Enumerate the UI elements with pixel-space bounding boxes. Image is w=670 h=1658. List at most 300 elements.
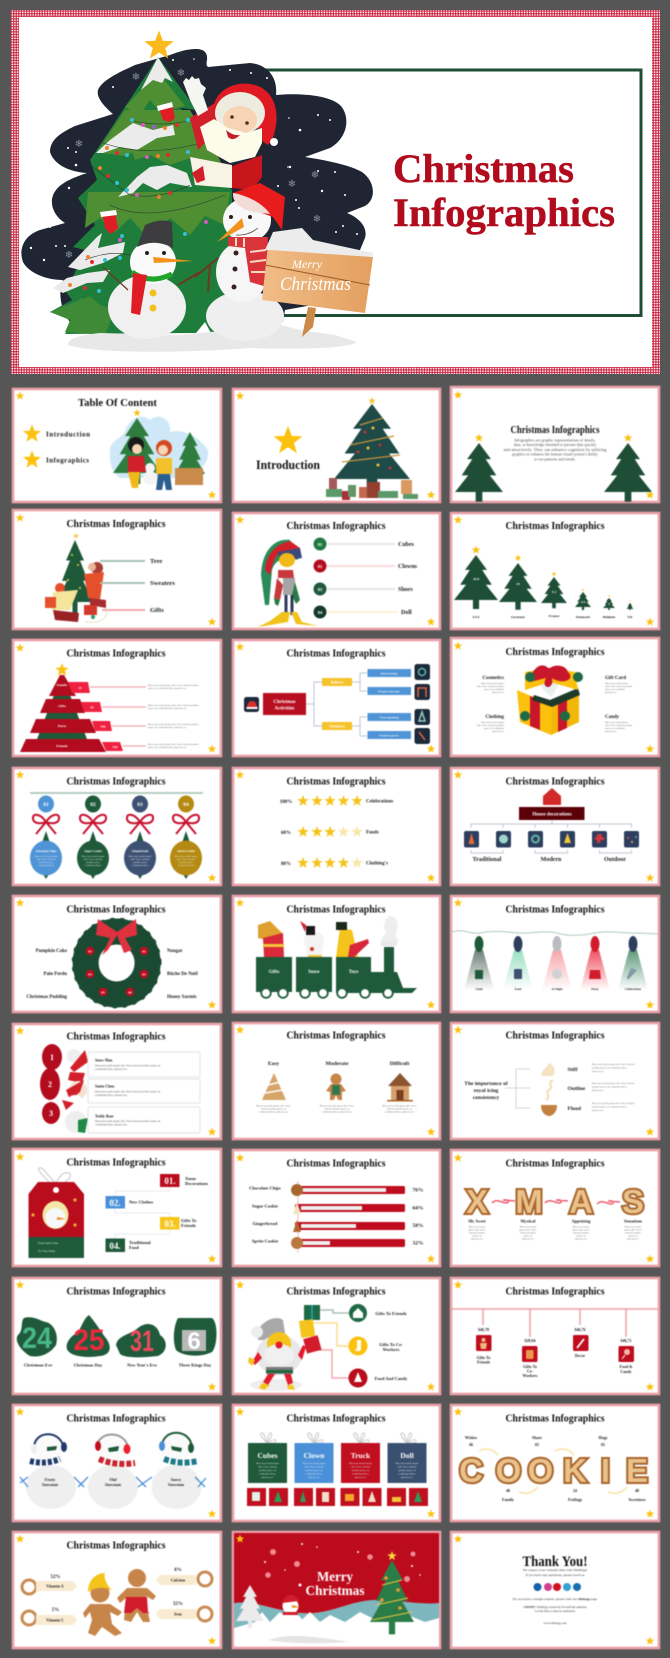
heading: Christmas Infographics — [286, 1030, 386, 1042]
right labels — [167, 949, 198, 1000]
cookie icons — [262, 1073, 413, 1102]
panel: santa gifts — [233, 1278, 440, 1394]
number blobs — [40, 1044, 62, 1124]
bottom labels: 24 — [573, 1488, 577, 1493]
tag hole — [53, 1187, 59, 1193]
budget labels — [477, 1353, 633, 1378]
values: 19 — [516, 582, 520, 586]
date numbers: 25 — [74, 1324, 104, 1357]
descriptions — [148, 684, 199, 749]
corner stars — [236, 1026, 435, 1136]
group labels — [473, 857, 626, 863]
country labels: France — [549, 614, 560, 618]
level labels: Moderate — [326, 1061, 349, 1067]
falling snow — [265, 1549, 416, 1582]
panel: pyramid tree — [13, 640, 221, 756]
panel: COOKIE — [451, 1405, 659, 1521]
beam labels: At Night — [551, 987, 563, 991]
hero Christmas tree — [50, 57, 232, 335]
corner stars — [236, 1408, 435, 1518]
small snow dots — [264, 1543, 421, 1586]
node circles — [348, 1304, 368, 1388]
card text: odio. Fusce lobortis — [351, 1466, 370, 1468]
cookies — [291, 1184, 303, 1249]
country labels: USA — [472, 615, 480, 619]
corner stars — [236, 770, 435, 882]
slide frame — [233, 1150, 440, 1266]
descriptions: vestibulum libero, pharetra nec — [259, 1110, 288, 1114]
card text: pharetra nec — [401, 1476, 413, 1479]
labels: Doll — [401, 610, 412, 616]
budget labels: Workers — [523, 1373, 538, 1378]
numbered circles — [314, 538, 326, 618]
letter descriptions: lobortis porttitor — [625, 1232, 641, 1234]
top labels: Hugs — [599, 1435, 608, 1440]
letter descriptions: Maecenas iaculis — [469, 1226, 485, 1228]
values: 32% — [412, 1240, 424, 1246]
gingerbread couple — [83, 1569, 156, 1636]
icon: house — [543, 788, 561, 805]
connectors — [471, 820, 632, 853]
corner stars — [16, 1152, 216, 1263]
card text: porttitor purus, sit — [398, 1469, 416, 1472]
snowman labels: Olaf — [109, 1478, 117, 1482]
panel: characters list — [13, 1024, 221, 1139]
card text: porttitor purus, sit — [259, 1469, 276, 1472]
panel: tree sweaters gifts — [13, 510, 221, 629]
ball numbers: 04 — [183, 802, 189, 808]
step numbers: 03. — [164, 1219, 176, 1229]
descriptions: purus, sit vestibulum libero pharetra nec — [148, 707, 187, 710]
ball numbers: 02 — [90, 802, 96, 808]
ornament text: Chocolate Chips — [35, 849, 57, 853]
date labels: Three Kings Day — [179, 1362, 212, 1368]
descriptions: purus, sit vestibulum — [605, 727, 625, 730]
node labels: Workers — [383, 1347, 400, 1352]
cookie letters — [466, 1183, 644, 1220]
corner stars — [236, 392, 435, 499]
header label: House decorations — [532, 812, 572, 818]
values: $28,04 — [524, 1338, 536, 1343]
descriptions: Maecenas iaculis ipsum — [481, 682, 504, 685]
descriptions: purus, sit vestibulum libero pharetra nec — [148, 726, 187, 729]
top labels: 65 — [601, 1442, 605, 1447]
tier labels: Party — [58, 724, 66, 728]
beam labels: Party — [591, 987, 599, 991]
step labels: New Clothes — [129, 1200, 153, 1204]
corner stars — [16, 1408, 216, 1518]
leaf labels: Festive party — [379, 733, 399, 737]
root box — [263, 693, 306, 715]
date labels — [24, 1362, 212, 1368]
icing labels — [568, 1067, 586, 1112]
leaf labels: Tree hunting — [379, 715, 399, 719]
values: 9.2 — [552, 590, 556, 594]
group labels: Outdoor — [604, 857, 626, 863]
descriptions: Maecenas iaculis ipsum — [605, 682, 628, 685]
budget labels: Food & — [620, 1364, 633, 1369]
descriptions — [477, 682, 633, 733]
bows — [33, 815, 199, 834]
labels: Gift Card — [605, 676, 626, 681]
ornament descriptions: Maecenas iaculis ipsum — [35, 855, 58, 858]
letter descriptions: Maecenas iaculis — [520, 1226, 536, 1228]
top labels: Wishes — [465, 1435, 478, 1440]
slide frame — [451, 1532, 659, 1648]
node labels — [375, 1311, 408, 1381]
thank you heading: Thank You! — [522, 1554, 588, 1570]
heading: Christmas Infographics — [506, 1286, 605, 1298]
connectors — [314, 1310, 350, 1378]
slide frame — [233, 640, 440, 756]
cookie letters — [459, 1452, 648, 1489]
corner stars — [16, 392, 216, 499]
ornament descriptions: odio. Fusce lobortis — [84, 858, 103, 861]
category labels — [366, 800, 393, 866]
row labels: Sprite Cookie — [252, 1238, 278, 1244]
leaf labels: Festive movies — [378, 689, 400, 693]
branch labels: Outdoors — [329, 724, 345, 728]
group labels: Traditional — [473, 857, 502, 863]
descriptions: vestibulum libero, pharetra nec — [385, 1110, 414, 1114]
ornament descriptions: porttitor purus — [179, 861, 193, 864]
values: 4.5 — [581, 600, 585, 604]
bottom labels: 48 — [635, 1488, 639, 1493]
descriptions: odio. Fusce lobortis porttitor — [477, 685, 504, 688]
letter descriptions: lobortis porttitor — [573, 1232, 589, 1234]
corner stars — [16, 898, 216, 1009]
white pine — [236, 1585, 264, 1628]
headphones — [34, 1433, 192, 1448]
hero white panel — [19, 17, 652, 367]
snowflakes: ❄ — [311, 170, 319, 181]
descriptions: porttitor purus, sit vestibulum libero, — [592, 1086, 628, 1088]
card text: Maecenas iaculis ipsum — [303, 1462, 326, 1465]
left labels: Pain Perdu — [43, 972, 67, 977]
numbers: 04 — [318, 610, 323, 615]
snowman labels — [42, 1478, 185, 1487]
descriptions: odio. Fusce lobortis porttitor — [605, 724, 633, 727]
ornament descriptions: vestibulum libero — [132, 864, 149, 867]
step labels: Friends — [181, 1223, 196, 1228]
corner stars — [236, 516, 435, 626]
corner stars — [454, 770, 654, 882]
letter descriptions: purus, sit — [577, 1234, 586, 1238]
budget labels: Gifts To — [523, 1364, 537, 1369]
root label: Activities — [274, 706, 295, 712]
statement: consistency — [473, 1095, 500, 1101]
budget labels: Candy — [620, 1369, 632, 1374]
branch boxes — [322, 678, 352, 730]
descriptions: odio. Fusce lobortis porttitor — [477, 724, 504, 727]
country labels: UK — [627, 615, 633, 619]
cookie letters: A — [569, 1183, 593, 1220]
ear cups — [31, 1441, 194, 1454]
slide frame — [451, 638, 659, 756]
level labels: Easy — [268, 1061, 279, 1067]
tag footer text: To: Your Name — [38, 1250, 56, 1253]
paragraph: to see patterns and trends. — [534, 456, 576, 461]
tag body — [28, 1182, 84, 1237]
date numbers — [22, 1322, 201, 1358]
tree star — [55, 663, 69, 676]
illustration: elf — [258, 540, 318, 627]
row labels: Chocolate Chips — [249, 1186, 281, 1190]
numbered dots — [86, 947, 148, 996]
labels: Cosmetics — [482, 676, 504, 681]
slide frame — [451, 387, 659, 502]
leaf boxes — [368, 669, 411, 739]
cookie letters: S — [622, 1183, 644, 1220]
tag string — [39, 1168, 70, 1190]
panel: hero cover — [11, 10, 660, 374]
branch labels — [329, 680, 345, 728]
tier labels: Gifts — [58, 704, 66, 708]
ornament text: Gingerbread — [132, 849, 149, 853]
letter descriptions: pharetra nec — [522, 1238, 534, 1240]
panel: table of content — [13, 389, 221, 502]
tier labels — [56, 683, 118, 749]
snowman labels: Snowman — [42, 1483, 59, 1487]
panel: budget — [451, 1278, 659, 1394]
slide frame — [451, 896, 659, 1012]
root label — [273, 700, 296, 712]
top labels: Share — [532, 1435, 542, 1440]
green title frame — [240, 70, 641, 316]
card text: porttitor purus, sit — [305, 1469, 323, 1472]
snow ground — [234, 1612, 439, 1646]
descriptions: Maecenas iaculis ipsum odio. Fusce lobortis porttitor — [148, 743, 199, 746]
leaf icon glyphs — [418, 668, 426, 740]
bulbs — [474, 936, 638, 952]
red icon tiles — [476, 1335, 634, 1362]
card titles — [257, 1451, 414, 1460]
list labels — [46, 430, 90, 464]
dot numbers: 02 — [142, 950, 146, 954]
card text: pharetra nec — [308, 1476, 320, 1479]
letter descriptions: ipsum odio. Fusce — [624, 1228, 642, 1232]
letter descriptions: lobortis porttitor — [469, 1232, 485, 1234]
heading: Christmas Infographics — [286, 904, 386, 916]
card headings: Snow Man — [95, 1058, 113, 1062]
right tree — [604, 434, 652, 502]
descriptions: pharetra nec — [592, 1089, 604, 1092]
labels: Sweaters — [150, 580, 175, 587]
card text: porttitor purus, sit — [352, 1469, 369, 1472]
descriptions: Maecenas iaculis ipsum odio. Fusce — [382, 1104, 417, 1108]
letter descriptions: purus, sit — [524, 1234, 533, 1238]
snowman heads — [34, 1435, 189, 1463]
decorated tree — [370, 1551, 414, 1634]
descriptions — [256, 1104, 417, 1114]
greeting: Merry — [317, 1570, 353, 1585]
scarves — [30, 1459, 198, 1464]
card titles: Truck — [351, 1451, 371, 1460]
labels: Gifts — [150, 607, 164, 614]
step numbers — [109, 1176, 176, 1251]
light beams — [464, 950, 648, 990]
corner stars — [454, 642, 654, 753]
cookie letters: K — [563, 1452, 587, 1489]
paragraph: and attractively. They can enhance cognition by utilizing — [504, 447, 606, 452]
cookie letters: M — [515, 1183, 543, 1220]
card text: odio. Fusce lobortis — [305, 1466, 324, 1468]
heading: Christmas Infographics — [506, 521, 605, 532]
letter descriptions: pharetra nec — [627, 1238, 639, 1240]
top labels: 46 — [469, 1442, 473, 1447]
corner stars — [16, 1026, 216, 1136]
slide frame — [13, 1278, 221, 1394]
card text: vestibulum libero, — [398, 1472, 416, 1476]
ball numbers: 01 — [43, 802, 49, 808]
dot numbers — [88, 950, 146, 994]
panel: train — [233, 896, 440, 1012]
panel: elf list — [233, 513, 440, 629]
nutrient labels — [46, 1578, 186, 1622]
card text: vestibulum libero, — [305, 1472, 323, 1476]
left labels — [26, 949, 68, 1000]
star on tree — [144, 30, 174, 59]
wheels — [261, 988, 393, 998]
statement — [464, 1081, 508, 1101]
numbers: 03 — [318, 587, 323, 592]
corner stars — [16, 770, 216, 882]
corner stars — [236, 898, 435, 1009]
descriptions: lobortis porttitor purus, sit — [261, 1108, 286, 1110]
dot numbers: 04 — [142, 972, 146, 976]
ornament caps — [42, 831, 190, 879]
nutrient labels: Vitamin A — [46, 1584, 64, 1588]
panel: gift box — [451, 638, 659, 756]
ornament descriptions — [35, 855, 198, 867]
card text: vestibulum libero, pharetra nec — [95, 1124, 128, 1126]
panel: introduction — [233, 389, 440, 502]
pink arrows — [492, 1200, 620, 1204]
heading: Introduction — [256, 457, 321, 472]
descriptions: purus, sit vestibulum — [605, 688, 625, 691]
wooden sign: Christmas — [280, 274, 351, 295]
slide frame — [233, 1278, 440, 1394]
corner stars — [454, 1280, 654, 1391]
red tiles — [247, 1488, 428, 1506]
rating stars — [297, 795, 363, 868]
node labels: Gifts To Friends — [375, 1311, 407, 1316]
heading: Christmas Infographics — [510, 425, 600, 436]
wire — [452, 931, 658, 935]
slide frame — [13, 768, 221, 885]
card text: vestibulum libero, pharetra nec — [95, 1094, 128, 1097]
descriptions: Maecenas iaculis ipsum odio. Fusce — [256, 1104, 291, 1108]
ornament descriptions: vestibulum libero — [85, 864, 102, 867]
illustration: children with snowman — [110, 409, 208, 490]
values: 64% — [412, 1206, 424, 1212]
dot numbers: 01 — [88, 950, 92, 954]
cookie letters: E — [626, 1452, 648, 1489]
heading: Christmas Infographics — [66, 1414, 166, 1424]
card titles: Doll — [400, 1451, 414, 1460]
large ornaments — [30, 840, 202, 876]
train labels — [269, 970, 358, 975]
card text: odio. Fusce lobortis — [258, 1466, 277, 1468]
country labels — [472, 614, 633, 619]
date numbers: 31 — [130, 1325, 154, 1358]
tier labels: 45 — [90, 706, 94, 710]
heading: Table Of Content — [78, 398, 158, 409]
panel: gift cards — [233, 1405, 440, 1521]
letter descriptions — [468, 1226, 642, 1240]
card titles: Clown — [304, 1451, 325, 1460]
corner star — [236, 1534, 244, 1543]
country labels: Denmark — [576, 615, 590, 619]
snowflakes: ❄ — [177, 68, 185, 79]
category labels: Foods — [366, 830, 379, 836]
numbers: 3 — [49, 1109, 53, 1118]
card headings — [95, 1058, 115, 1118]
heading: Christmas Infographics — [66, 776, 166, 788]
heading: Christmas Infographics — [286, 521, 386, 532]
bracket — [505, 1069, 530, 1108]
tier labels: Friends — [56, 744, 68, 748]
left labels: Christmas Pudding — [26, 995, 68, 1000]
snowman right — [178, 183, 285, 341]
group labels: Modern — [541, 857, 562, 863]
card text: Maecenas iaculis ipsum — [349, 1462, 372, 1465]
leaf labels: Decorating — [381, 671, 398, 675]
corner stars — [16, 514, 216, 626]
heading: Christmas Infographics — [286, 1158, 386, 1170]
corner stars — [454, 390, 654, 499]
values: $46,78 — [478, 1327, 489, 1332]
card text: Maecenas iaculis ipsum odio. Fusce lobortis porttitor purus, sit — [95, 1090, 161, 1094]
leader lines — [90, 687, 146, 746]
labels: Candy — [605, 715, 620, 720]
nutrient labels: Vitamin C — [46, 1618, 64, 1622]
category labels: Celebrations — [366, 800, 393, 804]
icing icons — [541, 1063, 557, 1116]
panel: star ratings — [233, 768, 440, 885]
train labels: Snow — [308, 970, 320, 975]
stockings — [102, 104, 175, 234]
train labels: Toys — [349, 970, 358, 975]
leaf labels — [378, 671, 400, 737]
nutrient labels: Iron — [174, 1612, 183, 1616]
smoke — [380, 916, 399, 942]
slide frame — [233, 1405, 440, 1521]
step labels — [129, 1176, 208, 1250]
gifts — [326, 478, 418, 500]
letter descriptions: purus, sit — [473, 1234, 482, 1238]
statement: royal icing — [474, 1088, 499, 1094]
tier labels: Family — [57, 683, 67, 687]
snowflakes: ❄ — [65, 250, 73, 261]
beam labels: Cloth — [475, 987, 483, 991]
red outfit — [124, 1597, 150, 1613]
slide frame — [13, 1149, 221, 1266]
step boxes — [106, 1174, 180, 1252]
panel: string lights — [451, 896, 659, 1012]
slide frame — [233, 1532, 440, 1648]
top labels — [465, 1435, 608, 1447]
percent labels — [280, 800, 292, 867]
heading: Christmas Infographics — [286, 648, 386, 660]
greeting — [306, 1570, 365, 1599]
snowman labels: Snowy — [171, 1478, 181, 1482]
step labels: Traditional — [129, 1240, 151, 1245]
date labels: Christmas Eve — [24, 1362, 52, 1368]
snowman labels: Frosty — [45, 1478, 55, 1482]
labels: Clowns — [398, 564, 418, 570]
snowflakes: ❄ — [313, 274, 321, 285]
